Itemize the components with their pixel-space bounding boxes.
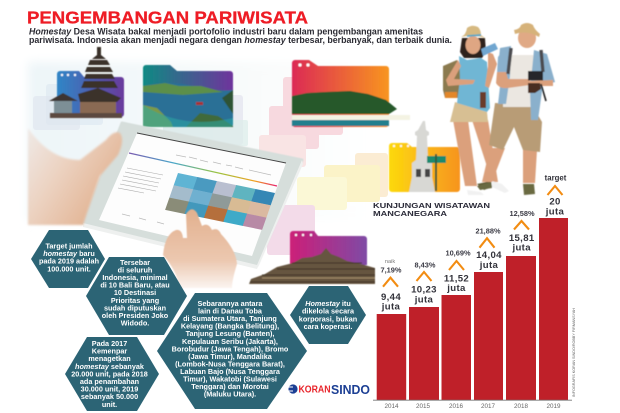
bar 2015: juta — [414, 294, 434, 306]
hexagon: sebaran destinasi: sudah diputuskan — [104, 303, 166, 312]
bar 2015 — [409, 260, 439, 410]
bar 2014 — [377, 259, 406, 410]
logo: Koran Sindo: KORAN — [298, 384, 330, 396]
bar 2018: 15,81 — [509, 233, 535, 244]
hexagon: korporasi: Homestay itu — [305, 299, 351, 308]
bar 2018: juta — [511, 243, 531, 254]
bar 2016: juta — [446, 283, 466, 294]
chart heading — [373, 201, 491, 218]
hexagon: lokasi destinasi: Labuan Bajo (Nusa Tenggara — [180, 367, 281, 376]
hexagon: sebaran destinasi: Tersebar — [120, 258, 150, 267]
credit line: INFOGRAFIS KORAN SINDO/ROBBY FIRMANSYAH — [572, 308, 576, 397]
hexagon: target Kemenpar: 20.000 unit, pada 2018 — [71, 369, 148, 378]
hexagon: lokasi destinasi: Tanjung Lesung (Banten), — [186, 329, 274, 338]
folder: island lagoon — [143, 65, 233, 127]
hexagon: korporasi: korporasi, bukan — [299, 314, 357, 323]
bar 2016: 11,52 — [444, 274, 469, 284]
bar 2016: 2016 — [449, 403, 463, 410]
background haze — [14, 0, 620, 255]
hexagon: sebaran destinasi: di 10 Bali Baru, atau — [100, 281, 170, 290]
hexagon: sebaran destinasi: Prioritas yang — [111, 296, 159, 305]
hexagon: lokasi destinasi: Borobudur (Jawa Tengah), Bromo — [172, 344, 289, 353]
bar 2015: 10,23 — [411, 284, 437, 296]
hexagon: target 100.000: homestay baru — [43, 249, 95, 258]
intro text — [29, 26, 452, 45]
bar 2018 — [506, 209, 536, 410]
hexagon: sebaran destinasi: di seluruh — [118, 266, 152, 275]
hexagon: sebaran destinasi: 10 Destinasi — [114, 288, 156, 297]
bar 2018: 2018 — [514, 403, 528, 410]
bar 2014: 2014 — [384, 403, 399, 410]
tablet illustration — [83, 123, 303, 269]
bar 2018: 12,58% — [509, 209, 535, 218]
left hand — [28, 128, 122, 225]
bar 2019: 20 — [549, 196, 561, 208]
folder: Tugu Yogyakarta — [389, 121, 460, 192]
intro text: pariwisata. Indonesia akan menjadi negara dengan homestay terbesar, berbanyak, dan terbaik dunia. — [29, 35, 452, 45]
right hand — [163, 209, 237, 288]
hexagon: lokasi destinasi: Tenggara) dan Morotai — [191, 382, 269, 391]
hexagon: target Kemenpar — [65, 337, 159, 411]
hexagon: korporasi: dikelola secara — [302, 307, 355, 316]
bar 2017: 2017 — [481, 403, 495, 410]
bar 2019: 2019 — [546, 403, 561, 410]
tourist couple photo — [443, 23, 555, 195]
hexagon: target Kemenpar: Kemenpar — [92, 347, 127, 356]
bar 2017: 14,04 — [476, 250, 502, 261]
hexagon: target Kemenpar: sebanyak 50.000 — [81, 392, 138, 401]
hexagon: target 100.000: pada 2019 adalah — [39, 257, 99, 266]
bar 2014: 7,19% — [381, 266, 402, 275]
bar 2016 — [442, 249, 471, 410]
hexagon: lokasi destinasi: lain di Danau Toba — [198, 307, 263, 316]
bar 2017 — [474, 227, 503, 410]
hexagon: korporasi: cara koperasi. — [304, 322, 352, 331]
logo: Koran Sindo — [288, 383, 370, 397]
chart heading: MANCANEGARA — [373, 209, 448, 218]
folder: Borobudur — [249, 231, 375, 284]
bar chart — [373, 173, 572, 410]
hexagon: korporasi — [290, 286, 366, 344]
hexagon: lokasi destinasi: Kepulauan Seribu (Jakarta), — [182, 337, 278, 346]
man — [477, 23, 555, 195]
title: PENGEMBANGAN PARIWISATA — [27, 8, 308, 28]
hexagon: sebaran destinasi: oleh Presiden Joko — [102, 311, 169, 320]
bar 2016: 10,69% — [445, 249, 471, 258]
hexagon: target 100.000: 100.000 unit. — [47, 264, 91, 273]
bar 2019 — [539, 173, 568, 410]
bar 2015: 8,43% — [415, 260, 436, 269]
hexagon: lokasi destinasi: (Maluku Utara). — [204, 390, 256, 399]
woman — [443, 26, 509, 195]
hexagon: lokasi destinasi: di Sumatera Utara, Tanjung — [183, 314, 277, 323]
hexagon: target Kemenpar: Pada 2017 — [92, 339, 127, 348]
hexagon: lokasi destinasi: (Lombok-Nusa Tenggara Barat), — [175, 359, 285, 368]
hexagon: lokasi destinasi — [157, 293, 307, 409]
bar 2015: 2015 — [416, 403, 430, 410]
bar 2014: naik — [385, 259, 395, 265]
hexagon: target Kemenpar: 30.000 unit, 2019 — [81, 385, 138, 394]
logo: Koran Sindo: SINDO — [331, 383, 370, 397]
bar 2019: target — [545, 173, 567, 182]
photo grid — [165, 173, 275, 230]
hexagon: lokasi destinasi: Timur), Wakatobi (Sulawesi — [183, 374, 277, 384]
hexagon: lokasi destinasi: Sebarannya antara — [198, 299, 263, 308]
hexagon: lokasi destinasi: Kelayang (Bangka Belitung), — [181, 322, 279, 331]
bar 2014: juta — [381, 302, 401, 312]
hexagon: target 100.000: Target jumlah — [46, 241, 92, 250]
folder: Bali temple — [49, 47, 124, 118]
chart heading: KUNJUNGAN WISATAWAN — [373, 201, 491, 210]
hexagon: target Kemenpar: unit. — [102, 400, 117, 409]
bar 2019: juta — [545, 206, 565, 217]
hexagon: target Kemenpar: homestay sebanyak — [75, 362, 145, 371]
hexagon: sebaran destinasi — [86, 257, 187, 335]
folder: coastal island — [292, 60, 410, 127]
intro text: Homestay Desa Wisata bakal menjadi portofolio industri baru dalam pengembangan amenitas — [29, 26, 423, 36]
hexagon: sebaran destinasi: Widodo. — [121, 318, 149, 327]
hexagon: target Kemenpar: ada penambahan — [80, 377, 139, 386]
hexagon: target 100.000 — [31, 230, 105, 288]
bar 2017: juta — [479, 260, 499, 271]
hexagon: lokasi destinasi: (Jawa Timur), Mandalika — [188, 352, 273, 361]
hexagon: sebaran destinasi: Indonesia, minimal — [102, 273, 168, 282]
bar 2017: 21,88% — [475, 227, 501, 236]
hexagon: target Kemenpar: menagetkan — [88, 354, 131, 363]
bar 2014: 9,44 — [381, 292, 401, 303]
